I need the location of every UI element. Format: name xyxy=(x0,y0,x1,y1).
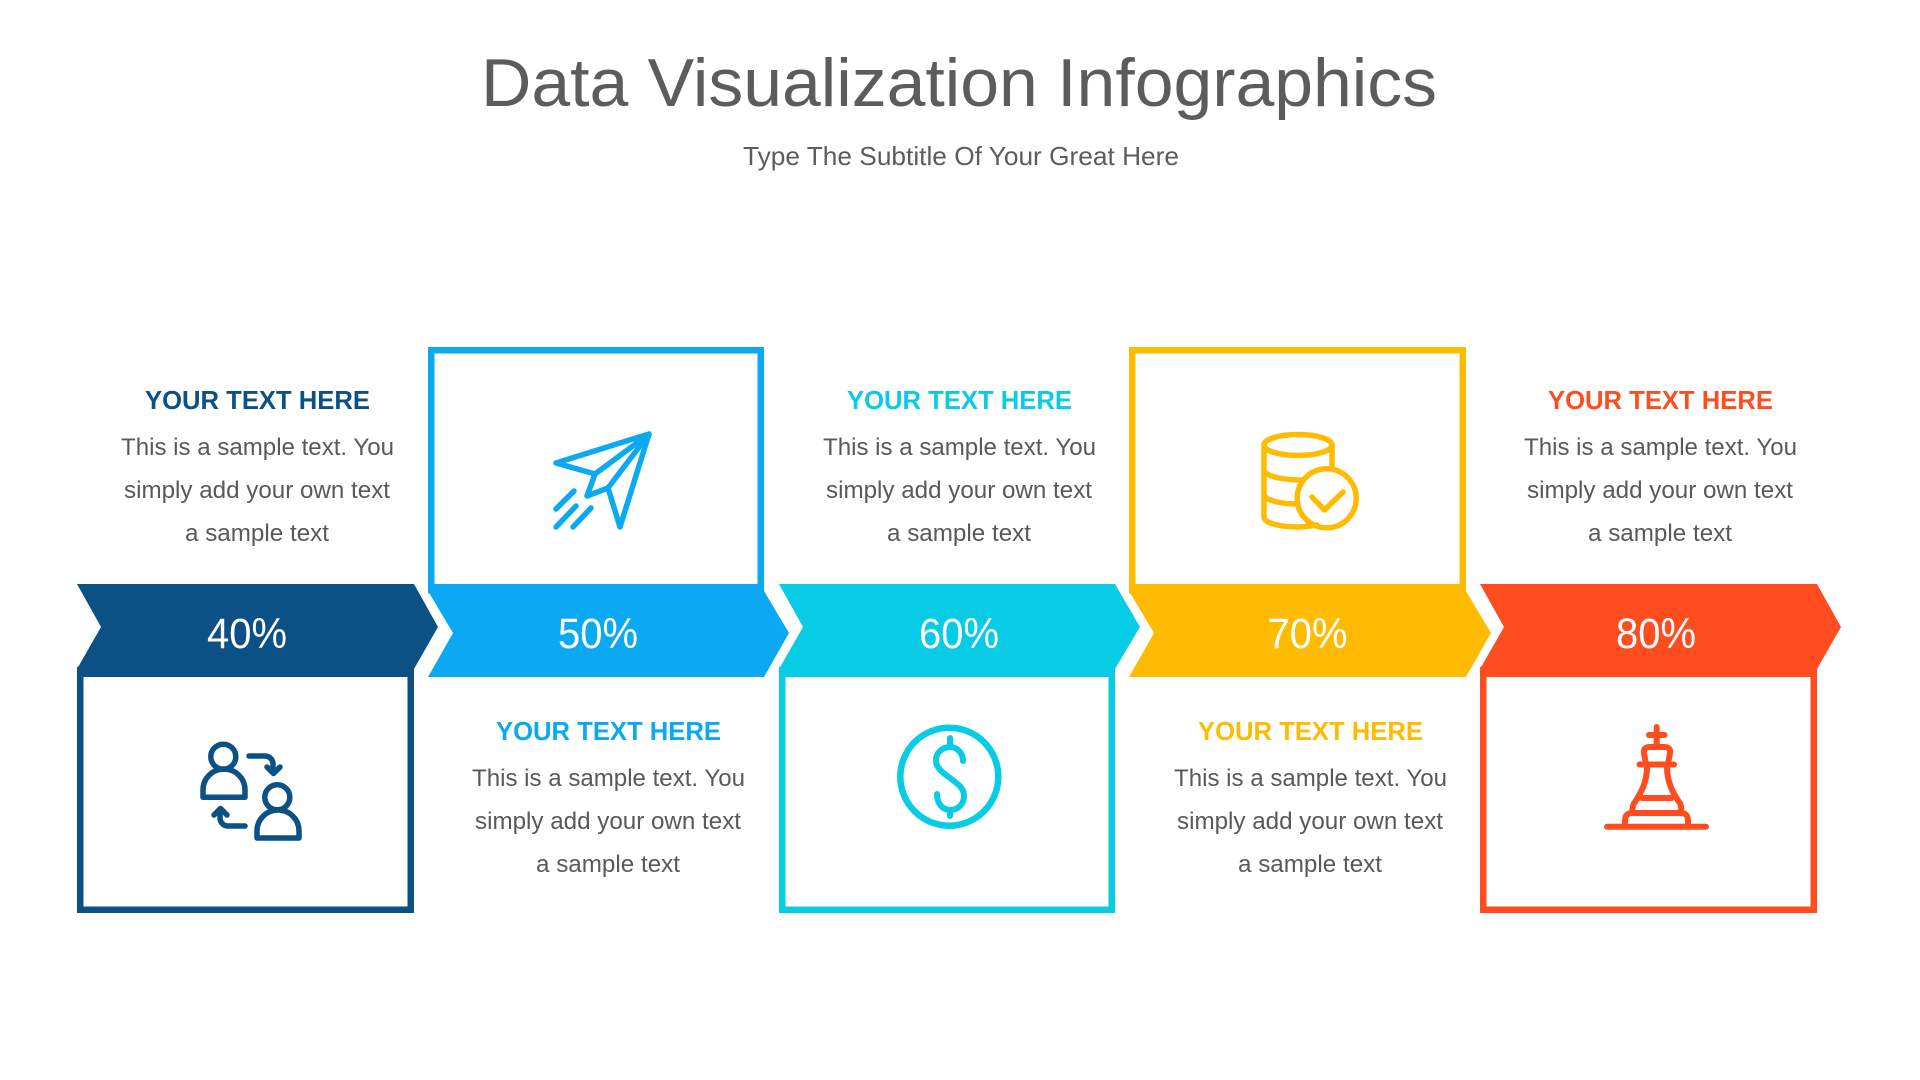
chevron 70% xyxy=(1129,584,1491,677)
percent 50%: 50% xyxy=(558,610,638,658)
percent 40%: 40% xyxy=(207,610,287,658)
heading 2: YOUR TEXT HERE xyxy=(496,716,721,746)
box frame 2 xyxy=(431,350,761,590)
icon: dollar coin xyxy=(900,728,998,826)
body 3: a sample text xyxy=(887,520,1031,547)
text block: step 1 xyxy=(121,385,394,547)
chevron 40% xyxy=(77,584,438,677)
icon: people exchange xyxy=(203,744,299,838)
text block: step 4 xyxy=(1174,716,1447,878)
body 4: This is a sample text. You xyxy=(1174,765,1447,792)
panel: step 1 40% xyxy=(77,584,438,910)
chevron 80% xyxy=(1480,584,1841,677)
percent 60%: 60% xyxy=(919,610,999,658)
icon: paper plane xyxy=(556,434,649,527)
panel: step 2 50% xyxy=(428,350,789,677)
percent 70%: 70% xyxy=(1268,610,1348,658)
chevron 60% xyxy=(779,584,1140,677)
body 4: a sample text xyxy=(1238,851,1382,878)
body 1 xyxy=(121,434,394,547)
body 5: This is a sample text. You xyxy=(1524,434,1797,461)
body 2: a sample text xyxy=(536,851,680,878)
heading 4: YOUR TEXT HERE xyxy=(1198,716,1423,746)
body 5: simply add your own text xyxy=(1527,477,1793,504)
subtitle: Type The Subtitle Of Your Great Here xyxy=(743,141,1179,171)
heading 5: YOUR TEXT HERE xyxy=(1548,385,1773,415)
panel: step 3 60% xyxy=(779,584,1140,910)
body 3: This is a sample text. You xyxy=(823,434,1096,461)
percent 80%: 80% xyxy=(1616,610,1696,658)
icon: chess king xyxy=(1607,727,1706,827)
body 2: This is a sample text. You xyxy=(472,765,745,792)
icon: database check xyxy=(1264,434,1356,528)
box frame 3 xyxy=(782,670,1112,910)
body 1: a sample text xyxy=(185,520,329,547)
body 1: simply add your own text xyxy=(124,477,390,504)
body 5 xyxy=(1524,434,1797,547)
text block: step 3 xyxy=(823,385,1096,547)
text block: step 5 xyxy=(1524,385,1797,547)
box frame 1 xyxy=(80,670,411,910)
body 2 xyxy=(472,765,745,878)
panel: step 5 80% xyxy=(1480,584,1841,910)
body 4 xyxy=(1174,765,1447,878)
heading 1: YOUR TEXT HERE xyxy=(145,385,370,415)
box frame 4 xyxy=(1132,350,1463,590)
body 4: simply add your own text xyxy=(1177,808,1443,835)
body 2: simply add your own text xyxy=(475,808,741,835)
body 3 xyxy=(823,434,1096,547)
title: Data Visualization Infographics xyxy=(481,45,1437,121)
body 1: This is a sample text. You xyxy=(121,434,394,461)
chevron 50% xyxy=(428,584,789,677)
heading 3: YOUR TEXT HERE xyxy=(847,385,1072,415)
body 3: simply add your own text xyxy=(826,477,1092,504)
text block: step 2 xyxy=(472,716,745,878)
body 5: a sample text xyxy=(1588,520,1732,547)
box frame 5 xyxy=(1483,670,1814,910)
panel: step 4 70% xyxy=(1129,350,1491,677)
